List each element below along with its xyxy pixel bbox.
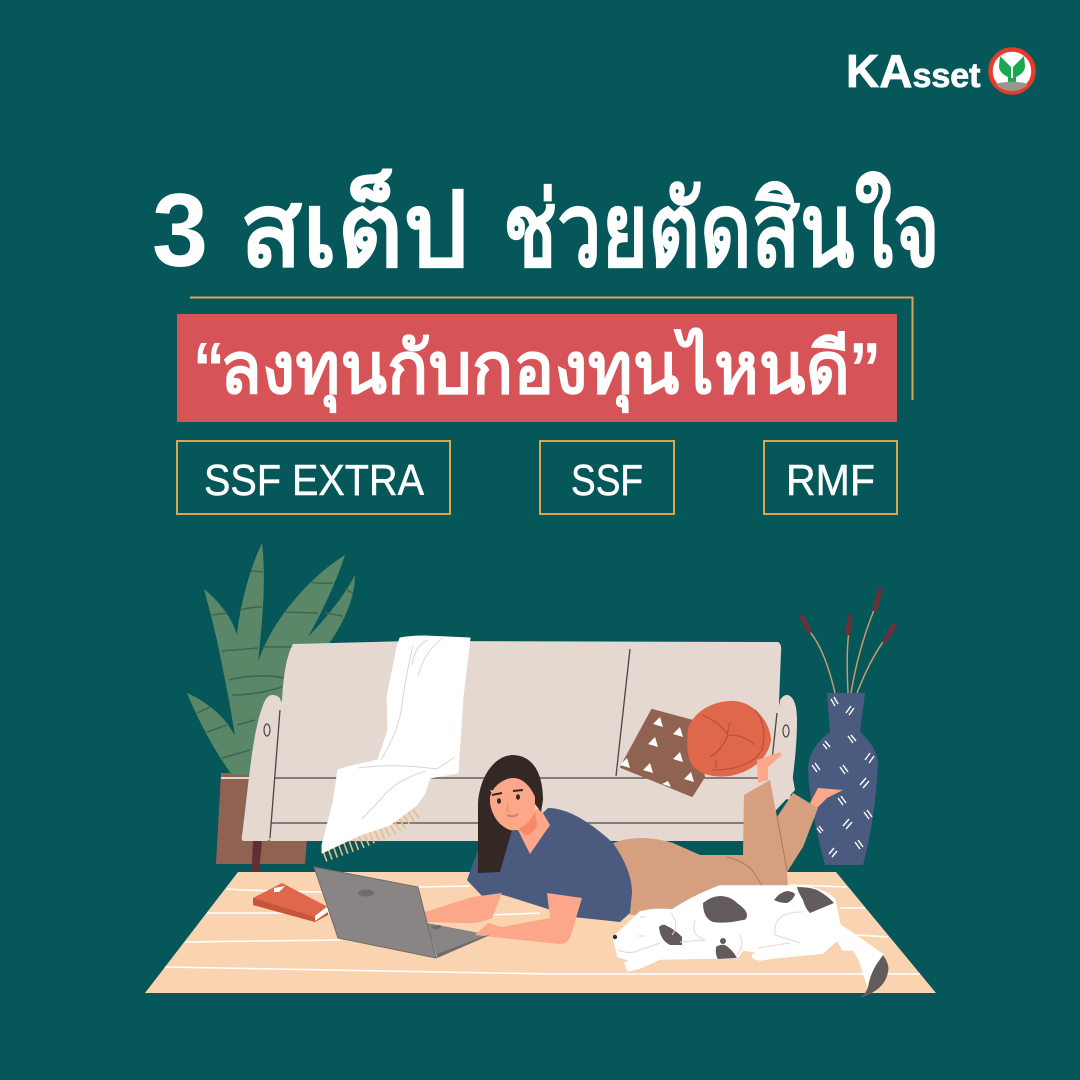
hair — [478, 755, 543, 873]
illustration: red book — [253, 883, 328, 922]
title: ช่วยตัดสินใจ — [503, 171, 940, 289]
tag: SSF — [540, 441, 674, 514]
illustration: dog — [613, 886, 888, 998]
illustration: sofa — [242, 641, 797, 886]
tag: SSF EXTRA: SSF EXTRA — [204, 456, 425, 505]
logo: KAsset: KAsset — [846, 45, 981, 97]
shirt — [467, 808, 632, 922]
subtitle banner — [177, 314, 897, 422]
gold corner line — [190, 298, 912, 400]
illustration: white blanket — [322, 636, 470, 853]
neck — [518, 808, 550, 854]
tag: RMF — [764, 441, 897, 514]
illustration: plant in pot — [187, 543, 355, 864]
subtitle banner: ” — [849, 329, 881, 409]
illustration: brown cushion — [620, 710, 704, 796]
face — [490, 778, 535, 830]
tag: SSF: SSF — [571, 456, 643, 505]
title: 3 — [152, 173, 208, 289]
laptop lid — [314, 867, 436, 958]
illustration: orange cushion — [687, 701, 771, 777]
arm left — [425, 893, 502, 923]
illustration: pants and legs — [613, 752, 843, 915]
title: สเต็ป — [240, 167, 468, 289]
subtitle banner: ลงทุนกับกองทุนไหนดี — [220, 326, 850, 414]
illustration: blanket fringe — [324, 811, 419, 856]
illustration: laptop base — [427, 923, 490, 958]
tag: SSF EXTRA — [177, 441, 450, 514]
illustration: vase with cattails — [802, 590, 894, 865]
illustration: rug — [145, 872, 936, 993]
tag: RMF: RMF — [786, 456, 875, 505]
illustration: woman — [314, 755, 632, 958]
subtitle banner: “ — [193, 329, 225, 409]
arm right — [475, 893, 582, 944]
